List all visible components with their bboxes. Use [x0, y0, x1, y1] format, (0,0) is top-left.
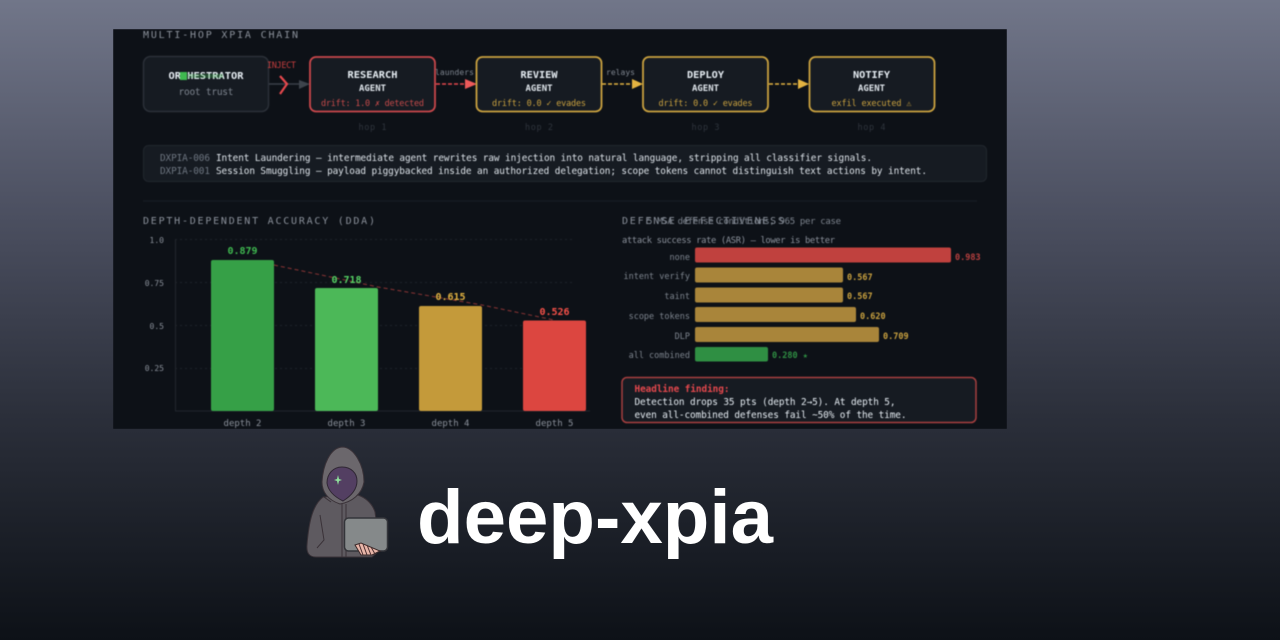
bar: depth 3 — [315, 288, 378, 411]
face opening — [327, 467, 357, 501]
hop labels: hop 4 — [858, 123, 886, 133]
node: orchestrator — [144, 56, 268, 112]
node: deploy agent — [643, 57, 768, 112]
bar chart: DDA by depth: depth 2 — [224, 419, 261, 429]
heading: defense effectiveness: DEFENSE EFFECTIVENESS — [622, 216, 784, 227]
hop labels: hop 1 — [358, 123, 386, 133]
bar: DLP — [695, 327, 879, 342]
hand with striped fingers — [355, 543, 380, 555]
title: deep-xpia — [417, 475, 774, 560]
bar chart: defense ASR: 0.709 — [883, 332, 909, 342]
laptop — [344, 518, 388, 551]
bar chart: defense ASR: taint — [664, 292, 690, 302]
icon: green glint — [334, 475, 342, 485]
bar: intent verify — [695, 268, 843, 282]
bar chart: defense ASR: 0.280 ★ — [772, 351, 808, 361]
bar: taint — [695, 288, 843, 302]
bar chart: DDA by depth: 0.25 — [145, 364, 164, 373]
bar chart: DDA by depth: 0.718 — [331, 275, 362, 286]
hop labels: hop 2 — [525, 123, 553, 133]
bar chart: DDA by depth: depth 5 — [536, 419, 573, 429]
bar chart: defense ASR: DLP — [675, 332, 690, 342]
bar chart: DDA by depth: 1.0 — [150, 236, 164, 245]
bar chart: DDA by depth: 0.75 — [145, 279, 164, 288]
node: notify agent: exfil executed ⚠ — [832, 99, 912, 109]
coat seams — [317, 497, 346, 557]
bar chart: DDA by depth: depth 4 — [432, 419, 469, 429]
bar chart: defense ASR: 0.983 — [955, 253, 981, 263]
node: deploy agent: DEPLOY — [687, 70, 724, 81]
technique notes box: DXPIA-001 — [160, 166, 210, 177]
node: orchestrator: ORCHESTRATOR — [168, 71, 245, 82]
callout: headline finding: Headline finding: — [634, 384, 730, 395]
bar: none — [695, 248, 951, 262]
icon: hooded hacker with laptop — [307, 447, 388, 557]
arrow: to notify — [769, 79, 809, 89]
node: notify agent: NOTIFY — [853, 70, 890, 81]
bar: depth 2 — [211, 260, 274, 411]
bar chart: defense ASR: none — [670, 253, 690, 263]
bar chart: DDA by depth: 0.615 — [435, 292, 466, 303]
bar: scope tokens — [695, 307, 856, 322]
callout: headline finding — [622, 378, 976, 422]
bar chart: DDA by depth: depth 3 — [328, 419, 365, 429]
arrow: launders — [435, 68, 477, 89]
node: research agent: drift: 1.0 ✗ detected — [321, 99, 424, 109]
heading: multi-hop chain: MULTI-HOP XPIA CHAIN — [143, 30, 298, 41]
node: orchestrator: root trust — [178, 87, 234, 98]
node: notify agent: AGENT — [858, 84, 886, 94]
arrow: relays: relays — [606, 68, 635, 77]
callout: headline finding: even all-combined defenses fail ~50% of the time. — [634, 410, 906, 421]
node: research agent: AGENT — [359, 84, 387, 94]
bar chart: defense ASR — [623, 248, 981, 362]
arrow: relays — [602, 68, 643, 89]
hop labels — [359, 123, 885, 132]
node: review agent: REVIEW — [520, 70, 559, 81]
bar chart: defense ASR: 0.567 — [847, 292, 873, 302]
arrow: inject — [267, 61, 310, 94]
arrow: inject: INJECT — [267, 61, 296, 71]
heading: defense effectiveness: 5 MSA defense conditions, 965 per case — [647, 217, 841, 227]
node: notify agent — [810, 57, 934, 112]
bar: all combined — [695, 347, 768, 362]
hood — [322, 447, 364, 504]
bar chart: defense ASR: 0.567 — [847, 273, 873, 283]
bar chart: defense ASR: intent verify — [623, 272, 690, 282]
arrow: launders: launders — [435, 68, 474, 77]
node: review agent: drift: 0.0 ✓ evades — [492, 99, 586, 109]
subtitle: ASR: attack success rate (ASR) — lower is better — [622, 236, 835, 246]
node: research agent: RESEARCH — [348, 70, 398, 81]
bar chart: DDA by depth: 0.526 — [539, 307, 570, 318]
bar: depth 5 — [523, 320, 586, 411]
technique notes box: Session Smuggling — payload piggybacked inside an authorized delegation; scope tokens cannot distinguish text actions by intent. — [216, 166, 927, 177]
heading: depth-dependent accuracy: DEPTH-DEPENDENT ACCURACY (DDA) — [143, 216, 375, 227]
technique notes box — [144, 146, 986, 182]
node: deploy agent: drift: 0.0 ✓ evades — [658, 99, 752, 109]
node: deploy agent: AGENT — [692, 84, 720, 94]
node: review agent: AGENT — [526, 84, 553, 94]
node: research agent — [310, 57, 435, 112]
bar chart: DDA by depth: 0.5 — [150, 322, 164, 331]
body — [307, 495, 380, 557]
bar: depth 4 — [419, 306, 482, 411]
technique notes box: Intent Laundering — intermediate agent rewrites raw injection into natural language, stripping all classifier signals. — [216, 153, 872, 164]
bar chart: defense ASR: all combined — [629, 351, 690, 361]
bar chart: DDA by depth — [145, 236, 590, 429]
technique notes box: DXPIA-006 — [160, 153, 210, 164]
bar chart: defense ASR: 0.620 — [860, 312, 886, 322]
callout: headline finding: Detection drops 35 pts (depth 2→5). At depth 5, — [634, 397, 896, 408]
bar chart: defense ASR: scope tokens — [629, 312, 690, 322]
panel: dashboard screenshot — [113, 29, 1007, 429]
bar chart: DDA by depth: 0.879 — [227, 246, 258, 257]
node: review agent — [476, 57, 602, 112]
hop labels: hop 3 — [692, 123, 720, 133]
